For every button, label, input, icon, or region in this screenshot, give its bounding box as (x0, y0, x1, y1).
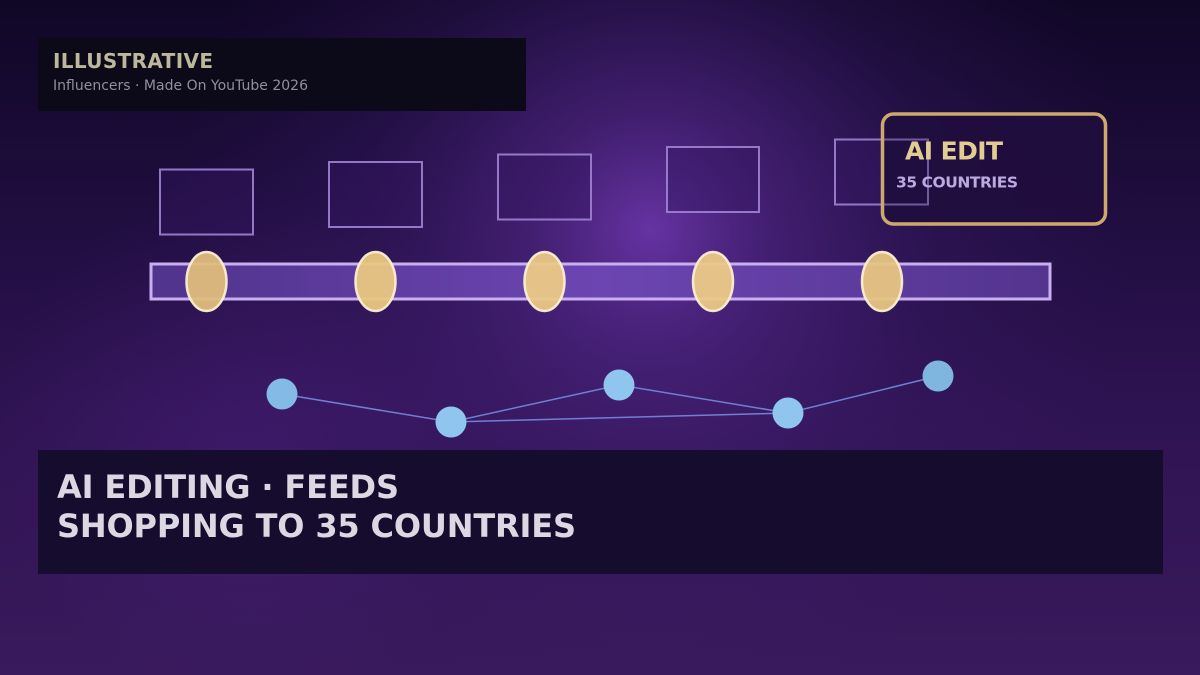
panel: headline (38, 450, 1163, 574)
headline line two: SHOPPING TO 35 COUNTRIES (57, 507, 576, 545)
label subtitle: Influencers · Made On YouTube 2026 (53, 78, 308, 94)
timeline bar (151, 264, 1050, 299)
panel: illustrative label (38, 38, 526, 111)
frames row (160, 140, 928, 234)
network lines (282, 376, 938, 422)
headline line one: AI EDITING · FEEDS (57, 468, 399, 506)
network nodes (266, 360, 954, 438)
frame overlap inside callout (884, 140, 928, 204)
callout: AI edit (882, 114, 1106, 224)
callout subtext: 35 COUNTRIES (896, 174, 1018, 192)
label heading: ILLUSTRATIVE (53, 49, 213, 73)
callout heading: AI EDIT (905, 136, 1003, 166)
timeline markers (186, 252, 902, 311)
